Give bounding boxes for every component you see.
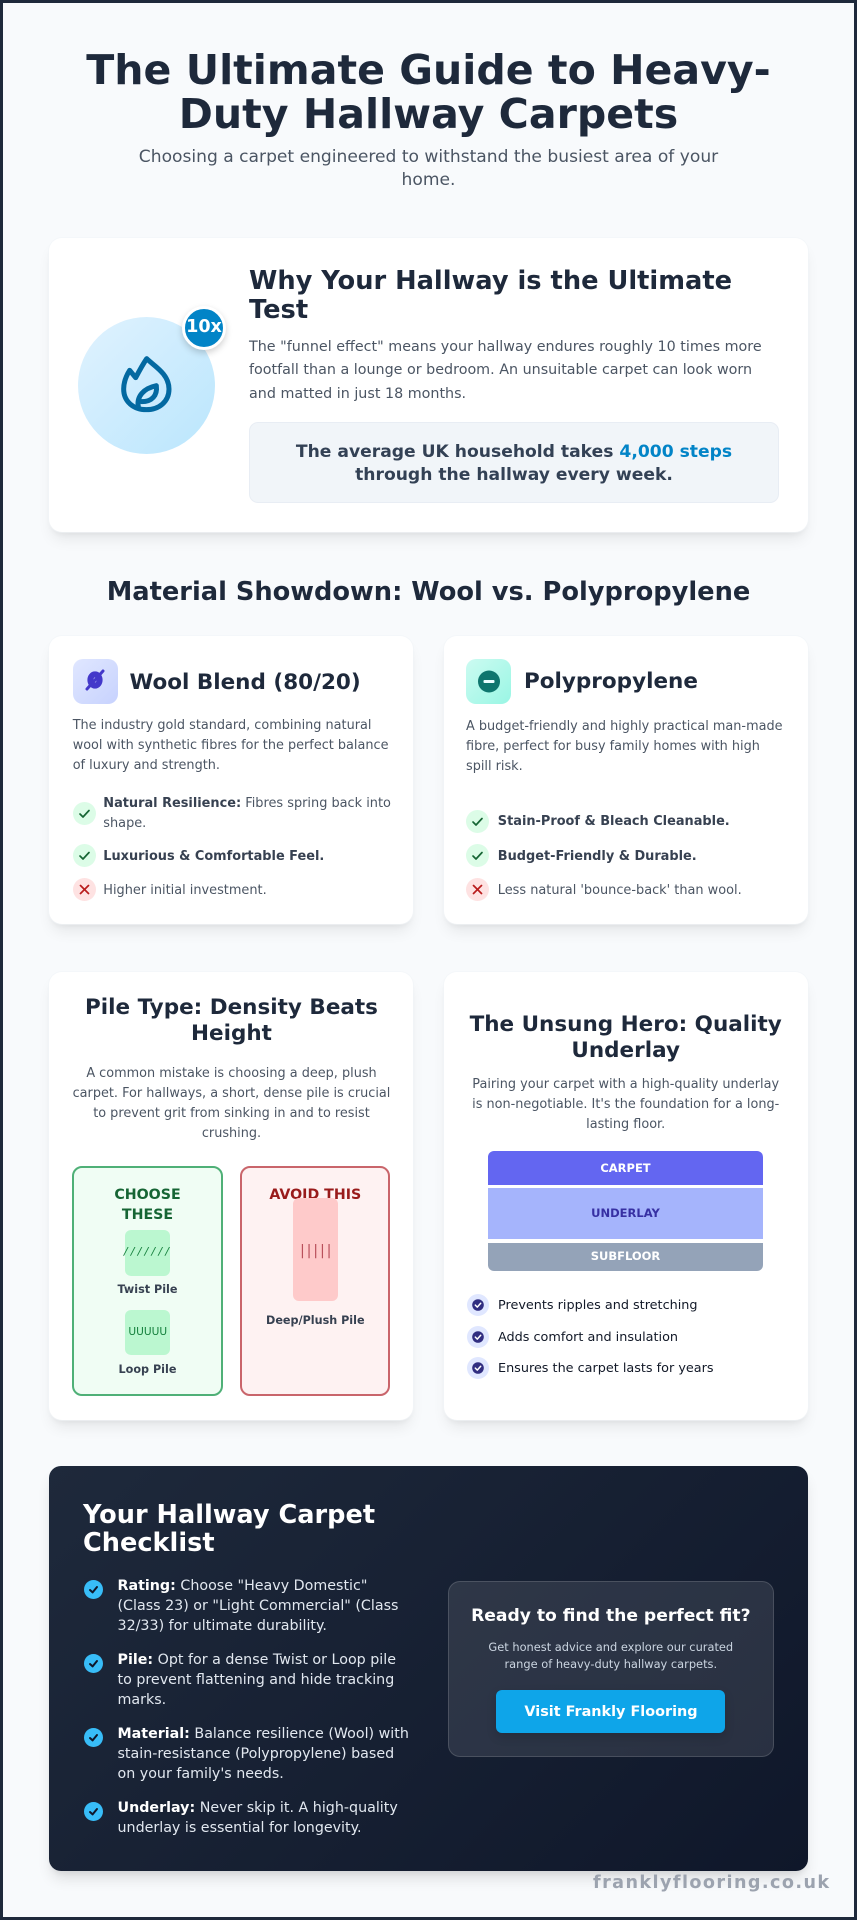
subtitle: home. (402, 170, 455, 190)
text: to prevent flattening and hide tracking (118, 1672, 394, 1688)
hallway heading (249, 266, 732, 325)
layer: carpet: CARPET (600, 1161, 651, 1175)
loop texture: UUUUU (128, 1326, 167, 1338)
wool pro: natural resilience (73, 796, 391, 831)
title: Duty Hallway Carpets (179, 90, 678, 138)
layer: subfloor: SUBFLOOR (591, 1249, 660, 1263)
underlay paragraph (472, 1077, 779, 1132)
item: material (84, 1726, 409, 1782)
pile heading (85, 995, 378, 1046)
cta title: Ready to find the perfect fit? (471, 1606, 751, 1626)
panel: checklist (49, 1466, 808, 1871)
pile paragraph: carpet. For hallways, a short, dense pile is crucial (73, 1086, 390, 1101)
button: visit (496, 1690, 725, 1733)
layer: carpet (488, 1151, 763, 1185)
choose heading: CHOOSE (114, 1186, 181, 1202)
text: Less natural 'bounce-back' than wool. (498, 883, 742, 898)
hallway heading: Why Your Hallway is the Ultimate (249, 266, 732, 296)
text (118, 1726, 409, 1782)
layer: underlay (488, 1188, 763, 1239)
text: Material: Balance resilience (Wool) with (118, 1726, 409, 1742)
wool title: Wool Blend (80/20) (130, 670, 361, 694)
twist texture: /////// (124, 1245, 172, 1258)
pile paragraph (73, 1066, 390, 1141)
checklist heading: Your Hallway Carpet (83, 1500, 375, 1530)
twist pile swatch (125, 1230, 170, 1276)
panel: why your hallway (49, 238, 808, 532)
hallway paragraph (248, 339, 762, 402)
text: on your family's needs. (118, 1766, 284, 1782)
pile paragraph: crushing. (202, 1126, 261, 1141)
icon: check (84, 1580, 103, 1598)
underlay paragraph: is non-negotiable. It's the foundation for a long- (472, 1097, 779, 1112)
text: stain-resistance (Polypropylene) based (118, 1746, 394, 1762)
section heading: material showdown: Material Showdown: Wool vs. Polypropylene (107, 577, 750, 607)
polypropylene description (466, 718, 783, 774)
text (118, 1800, 398, 1836)
panel: avoid this (240, 1166, 390, 1396)
panel: underlay (444, 972, 808, 1420)
benefit: longevity (467, 1357, 714, 1379)
icon: badge check (467, 1326, 489, 1348)
callout: 4,000 steps: through the hallway every week. (355, 464, 673, 484)
icon: check (84, 1654, 103, 1672)
wool description: of luxury and strength. (73, 758, 220, 773)
text: Natural Resilience: Fibres spring back into (103, 796, 391, 811)
deep label: Deep/Plush Pile (266, 1314, 365, 1327)
polypropylene description: A budget-friendly and highly practical man-made (466, 718, 783, 734)
underlay heading: The Unsung Hero: Quality (470, 1012, 782, 1037)
cta text (488, 1640, 733, 1671)
underlay heading: Underlay (571, 1038, 680, 1063)
checklist heading: Checklist (83, 1528, 215, 1558)
layer diagram (488, 1151, 763, 1271)
hallway paragraph: and matted in just 18 months. (249, 386, 466, 402)
benefit: comfort (467, 1326, 678, 1348)
subtitle: Choosing a carpet engineered to withstand the busiest area of your (139, 147, 718, 167)
text: shape. (103, 816, 146, 831)
callout: 4,000 steps: The average UK household takes 4,000 steps (296, 442, 732, 462)
layer: subfloor (488, 1243, 763, 1271)
icon: cross (466, 878, 489, 901)
text: (Class 23) or "Light Commercial" (Class (118, 1598, 398, 1614)
pile heading: Pile Type: Density Beats (85, 995, 378, 1020)
icon: polypropylene (466, 659, 511, 704)
icon background circle (78, 317, 215, 454)
title (86, 46, 771, 138)
icon: cross (73, 878, 96, 901)
icon: check (84, 1802, 103, 1820)
icon: check (466, 844, 489, 867)
pile paragraph: to prevent grit from sinking in and to resist (93, 1106, 370, 1121)
pile paragraph: A common mistake is choosing a deep, plush (86, 1066, 377, 1081)
text: marks. (118, 1692, 166, 1708)
text: Underlay: Never skip it. A high-quality (118, 1800, 398, 1816)
badge: 10x: 10x (186, 317, 222, 337)
panel: call to action (448, 1581, 774, 1757)
text: Stain-Proof & Bleach Cleanable. (498, 814, 730, 829)
hallway heading: Test (249, 295, 308, 325)
hallway paragraph: footfall than a lounge or bedroom. An unsuitable carpet can look worn (249, 362, 752, 378)
title: The Ultimate Guide to Heavy- (86, 46, 771, 94)
text: 32/33) for ultimate durability. (118, 1618, 327, 1634)
choose heading: THESE (122, 1206, 173, 1222)
subtitle (139, 147, 718, 190)
loop pile swatch (125, 1310, 170, 1355)
text (118, 1652, 396, 1708)
text: Budget-Friendly & Durable. (498, 849, 697, 864)
poly pro: budget (466, 844, 697, 867)
item: underlay (84, 1800, 398, 1836)
item: pile (84, 1652, 396, 1708)
polypropylene description: spill risk. (466, 758, 523, 774)
watermark: franklyflooring.co.uk (593, 1873, 831, 1893)
panel: choose these (72, 1166, 223, 1396)
panel: pile type (49, 972, 413, 1420)
checklist heading (82, 1500, 375, 1558)
deep texture: ||||| (300, 1243, 333, 1259)
text (118, 1578, 398, 1634)
wool description (72, 718, 388, 773)
poly con: bounce back (466, 878, 742, 901)
twist label: Twist Pile (118, 1283, 177, 1296)
text (103, 796, 391, 831)
polypropylene description: fibre, perfect for busy family homes with high (466, 738, 760, 754)
text: underlay is essential for longevity. (118, 1820, 362, 1836)
text: Rating: Choose "Heavy Domestic" (118, 1578, 367, 1594)
panel: polypropylene (444, 636, 808, 924)
panel: wool blend (49, 636, 413, 924)
benefit: ripples (467, 1294, 698, 1316)
text: Pile: Opt for a dense Twist or Loop pile (118, 1652, 396, 1668)
icon: check (73, 802, 96, 825)
deep pile swatch (293, 1198, 338, 1301)
icon: wool (73, 659, 118, 704)
wool pro: feel (73, 844, 324, 867)
cta text: Get honest advice and explore our curated (488, 1640, 733, 1654)
icon: check (84, 1728, 103, 1746)
item: rating (84, 1578, 398, 1634)
text: Adds comfort and insulation (498, 1330, 678, 1345)
underlay heading (470, 1012, 782, 1063)
polypropylene title: Polypropylene (524, 669, 698, 694)
underlay paragraph: Pairing your carpet with a high-quality underlay (472, 1077, 779, 1092)
wool description: wool with synthetic fibres for the perfect balance (73, 738, 388, 753)
icon: footfall circle with flame (78, 317, 215, 454)
layer: underlay: UNDERLAY (591, 1206, 660, 1220)
loop label: Loop Pile (119, 1363, 176, 1376)
text: Prevents ripples and stretching (498, 1298, 698, 1313)
callout: 4,000 steps (249, 422, 779, 503)
icon: flame (121, 356, 172, 412)
icon: check (73, 844, 96, 867)
text: Luxurious & Comfortable Feel. (103, 849, 324, 864)
icon: badge check (467, 1294, 489, 1316)
cta text: range of heavy-duty hallway carpets. (504, 1657, 717, 1671)
button: visit: Visit Frankly Flooring (524, 1704, 698, 1720)
wool con: investment (73, 878, 267, 901)
icon: badge check (467, 1357, 489, 1379)
poly pro: stain proof (466, 810, 730, 833)
text: Ensures the carpet lasts for years (498, 1361, 714, 1376)
avoid heading: AVOID THIS (269, 1186, 361, 1202)
badge: 10x (182, 306, 226, 350)
wool description: The industry gold standard, combining natural (73, 718, 371, 733)
icon: check (466, 810, 489, 833)
hallway paragraph: The "funnel effect" means your hallway endures roughly 10 times more (249, 339, 762, 355)
choose heading (114, 1186, 181, 1222)
text: Higher initial investment. (103, 883, 267, 898)
underlay paragraph: lasting floor. (586, 1117, 665, 1132)
pile heading: Height (191, 1021, 272, 1046)
